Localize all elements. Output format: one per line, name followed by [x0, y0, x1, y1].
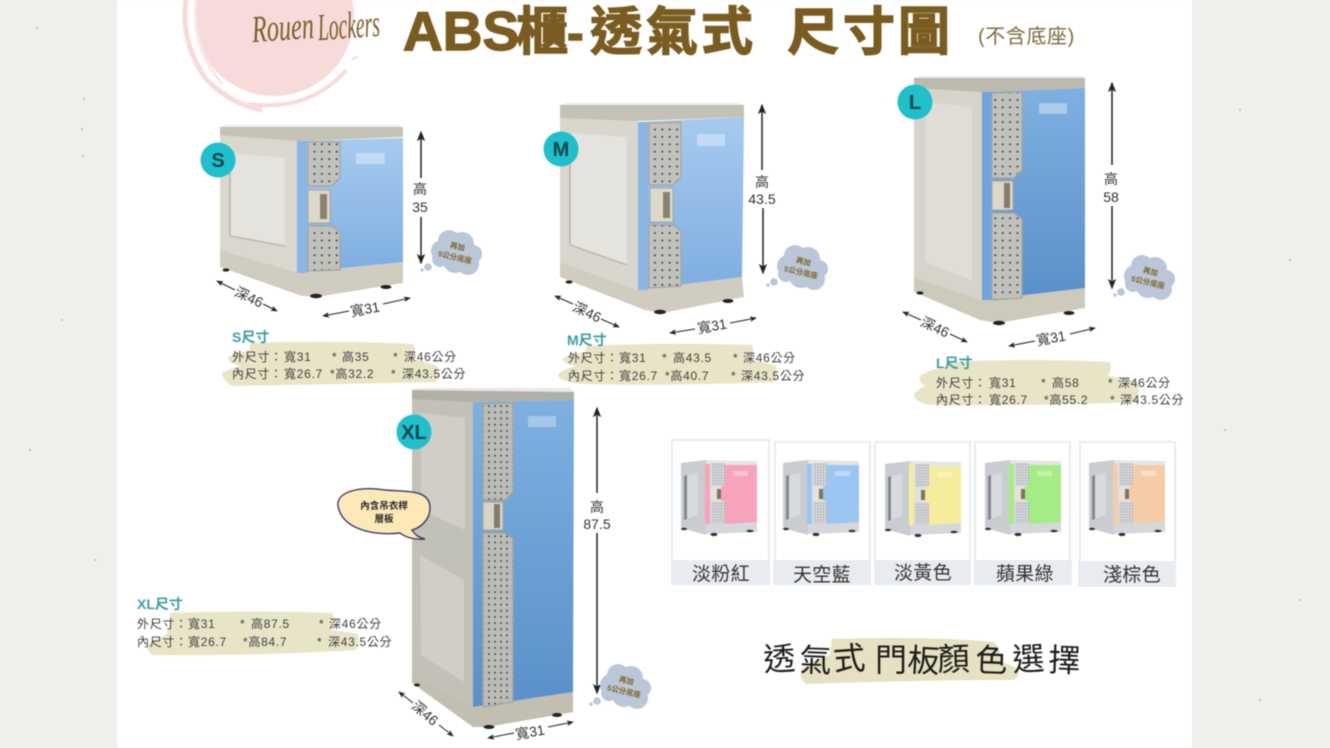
height arrow XL: 高: [590, 499, 604, 515]
swatch: light brown: 淺棕色: [1103, 564, 1161, 586]
title: 圖: [898, 4, 950, 62]
depth arrow M: [555, 296, 619, 327]
panel: M size spec: 深43.5公分: [741, 369, 805, 383]
panel: door colour swatches: [671, 440, 1176, 587]
base note cloud S: 再加: [449, 240, 466, 253]
panel: S size spec: *: [393, 350, 398, 364]
height arrow S: [412, 132, 428, 263]
title: 櫃: [516, 4, 568, 62]
width arrow XL: [488, 722, 573, 742]
height arrow XL: 87.5: [583, 516, 611, 532]
locker XL body: [412, 388, 574, 729]
badge XL: XL: [401, 422, 427, 444]
width arrow S: 寬31: [349, 299, 381, 319]
width arrow L: 寬31: [1035, 328, 1067, 348]
logo: script wordmark: Lockers: [316, 3, 381, 49]
panel: L size spec: 內尺寸：: [936, 393, 987, 407]
panel: L size spec: 外尺寸：: [936, 376, 987, 390]
swatch: light yellow: 淡黃色: [894, 562, 952, 584]
panel: M size spec: *: [662, 351, 667, 365]
panel: L size spec: *: [1108, 376, 1113, 390]
panel: L size spec: 深46公分: [1118, 376, 1171, 390]
panel: M size spec: M尺寸: [567, 332, 607, 348]
base note cloud L: [1113, 255, 1175, 300]
badge XL: [396, 414, 432, 450]
panel: S size spec: *: [332, 350, 337, 364]
caption: vent-style door colour options: 透氣式門板顏色選擇: [762, 640, 1081, 680]
width arrow S: [323, 298, 410, 319]
panel: XL size spec: 深46公分: [329, 617, 382, 631]
panel: XL size spec: *: [317, 635, 322, 649]
panel: XL size spec: *: [240, 617, 245, 631]
base note cloud L: 再加: [1142, 265, 1159, 278]
panel: M size spec: *: [733, 351, 738, 365]
height arrow L: [1103, 83, 1119, 288]
swatch: light brown: [1078, 442, 1176, 587]
panel: M size spec: *: [731, 369, 736, 383]
swatch: light yellow: [874, 442, 971, 585]
panel: L size spec: *: [1041, 376, 1046, 390]
title: ABS: [403, 0, 519, 62]
panel: M size spec: [558, 332, 805, 385]
swatch: sky blue: 天空藍: [793, 564, 851, 586]
panel: S size spec: [222, 329, 466, 386]
logo: script wordmark: Rouen: [250, 5, 315, 51]
title: 尺: [787, 4, 839, 62]
depth arrow S: [217, 281, 277, 311]
panel: S size spec: 外尺寸：: [232, 350, 283, 364]
title: 氣: [646, 4, 698, 62]
panel: XL size spec: 寬26.7: [188, 634, 227, 649]
panel: S locker: [200, 125, 482, 319]
panel: L size spec: *: [1110, 393, 1115, 407]
title: 寸: [843, 4, 895, 62]
width arrow XL: 寬31: [514, 722, 546, 742]
panel: XL size spec: 寬31: [188, 616, 215, 631]
depth arrow S: 深46: [232, 283, 266, 311]
height arrow M: 高: [755, 174, 769, 190]
swatch: light pink: 淡粉紅: [692, 563, 750, 585]
base note cloud M: 5公分底座: [783, 263, 819, 281]
panel: XL size spec: *高84.7: [243, 634, 287, 649]
panel: XL size spec: 內尺寸：: [137, 635, 188, 649]
logo: pink brush circle: [185, 0, 358, 110]
panel: XL size spec: 外尺寸：: [137, 617, 188, 631]
panel: L size spec: 寬26.7: [989, 392, 1028, 407]
panel: S size spec: 內尺寸：: [232, 367, 283, 381]
panel: L size spec: 寬31: [989, 375, 1016, 390]
width arrow M: 寬31: [696, 316, 728, 336]
badge L: [898, 84, 932, 120]
subtitle: excluding base: (不含底座): [978, 25, 1075, 48]
height arrow S: 高: [413, 181, 427, 197]
height arrow M: [748, 105, 776, 273]
panel: XL size spec: 高87.5: [251, 616, 290, 631]
depth arrow XL: [399, 692, 453, 736]
panel: M size spec: 寬26.7: [619, 368, 658, 383]
swatch: apple green: 蘋果綠: [996, 563, 1054, 585]
depth arrow L: 深46: [918, 313, 952, 341]
title: 透: [590, 4, 642, 62]
panel: XL size spec: 深43.5公分: [328, 635, 392, 649]
panel: XL size spec: *: [319, 617, 324, 631]
base note cloud XL: 5公分底座: [606, 682, 642, 700]
base note cloud M: [766, 245, 828, 290]
swatch: apple green: [974, 442, 1072, 585]
title: 式: [701, 4, 753, 62]
badge M: [544, 132, 578, 166]
panel: L size spec: 深43.5公分: [1120, 393, 1184, 407]
panel: S size spec: S尺寸: [232, 329, 269, 345]
swatch: sky blue: [773, 442, 871, 586]
base note cloud S: [420, 230, 482, 275]
panel: M size spec: 高43.5: [673, 350, 712, 365]
panel: S size spec: 寬26.7: [284, 366, 323, 381]
panel: M size spec: 寬31: [619, 350, 646, 365]
callout: hanging rail shelf: [338, 489, 430, 539]
height arrow L: 高: [1104, 171, 1118, 187]
width arrow M: [670, 316, 756, 336]
panel: XL size spec: XL尺寸: [137, 596, 183, 612]
badge S: [200, 142, 236, 178]
height arrow XL: [583, 408, 611, 693]
width arrow L: [1009, 328, 1095, 348]
panel: M size spec: 外尺寸：: [568, 351, 619, 365]
title: -: [567, 5, 584, 61]
base note cloud M: 再加: [795, 255, 812, 268]
panel: S size spec: 深43.5公分: [402, 367, 466, 381]
panel: L size spec: [914, 355, 1184, 407]
locker M body: [560, 103, 744, 314]
panel: M size spec: *高40.7: [665, 368, 709, 383]
panel: M size spec: 內尺寸：: [568, 369, 619, 383]
height arrow M: 43.5: [748, 191, 776, 207]
depth arrow L: [903, 312, 967, 342]
depth arrow M: 深46: [570, 298, 604, 326]
panel: L size spec: 高58: [1052, 375, 1079, 390]
base note cloud L: 5公分底座: [1130, 273, 1166, 291]
base note cloud XL: [589, 664, 651, 709]
badge S: S: [211, 150, 225, 172]
panel: M size spec: 深46公分: [743, 351, 796, 365]
swatch: light pink: [671, 440, 769, 585]
badge M: M: [553, 139, 569, 161]
badge L: L: [909, 92, 921, 114]
panel: S size spec: 寬31: [284, 349, 311, 364]
panel: L locker: [898, 76, 1175, 348]
callout: hanging rail shelf: 內含吊衣桿: [360, 500, 408, 512]
panel: L size spec: *高55.2: [1044, 392, 1088, 407]
locker S body: [220, 125, 403, 298]
panel: S size spec: *: [391, 367, 396, 381]
panel: M locker: [544, 103, 828, 336]
panel: S size spec: *高32.2: [330, 366, 374, 381]
height arrow L: 58: [1103, 189, 1119, 205]
locker L body: [914, 76, 1085, 325]
panel: S size spec: 高35: [342, 349, 369, 364]
panel: S size spec: 深46公分: [404, 350, 457, 364]
height arrow S: 35: [412, 199, 428, 215]
panel: XL size spec: [137, 596, 392, 655]
base note cloud XL: 再加: [618, 674, 635, 687]
base note cloud S: 5公分底座: [437, 248, 473, 266]
panel: XL locker: [338, 388, 651, 742]
panel: L size spec: L尺寸: [936, 355, 973, 371]
depth arrow XL: 深46: [409, 697, 442, 729]
callout: hanging rail shelf: 層板: [374, 513, 394, 525]
